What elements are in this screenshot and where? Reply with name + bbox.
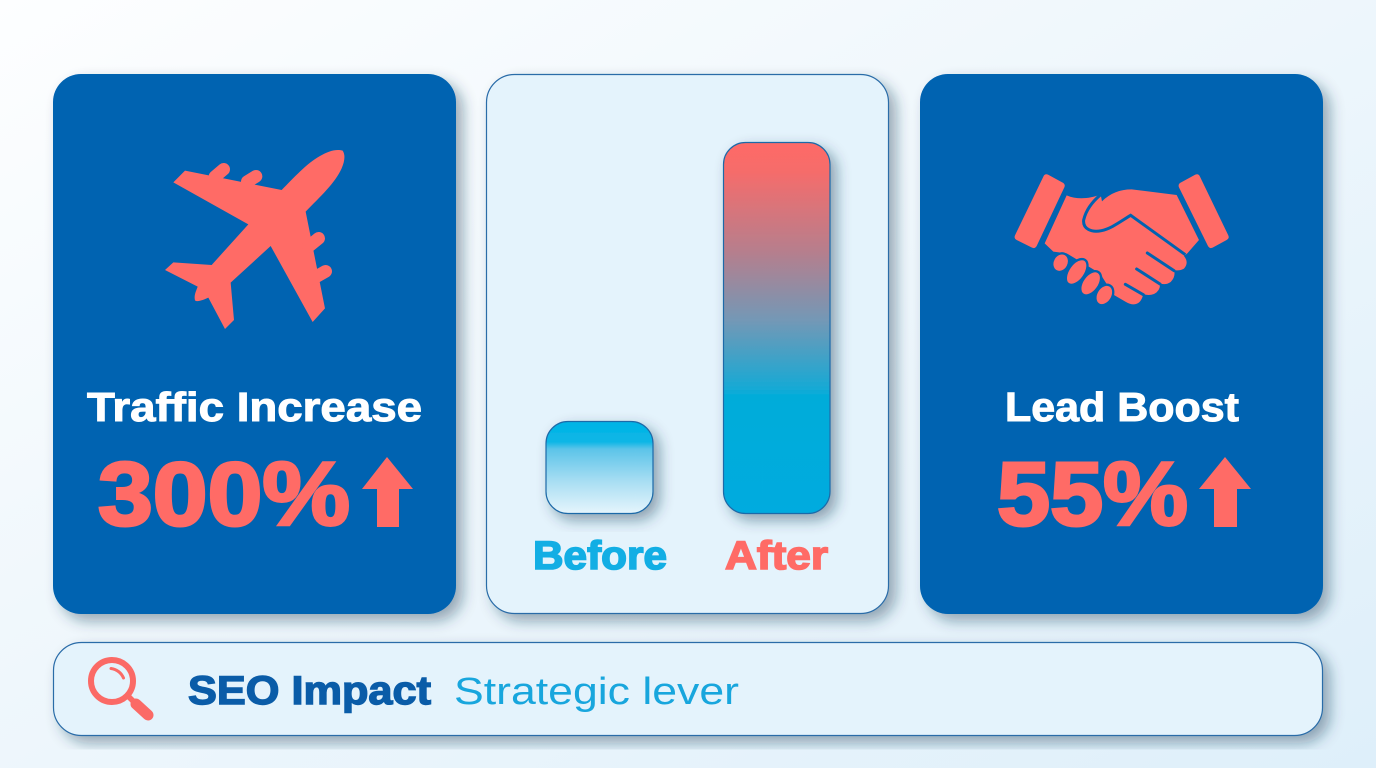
arrow: up xyxy=(362,457,413,527)
panel: traffic increase xyxy=(53,74,456,614)
arrow: up xyxy=(1199,457,1251,527)
icon: airplane xyxy=(165,150,344,329)
bar: after xyxy=(724,142,830,514)
stat: 300%: 300% xyxy=(98,445,350,545)
icon: magnifying glass xyxy=(91,660,148,715)
heading: lead boost: Lead Boost xyxy=(1005,384,1239,430)
icon: handshake xyxy=(1015,174,1229,309)
card: lead boost background xyxy=(920,74,1323,614)
heading: seo impact: SEO Impact xyxy=(188,669,431,713)
stat: 55%: 55% xyxy=(997,445,1188,545)
label: before: Before xyxy=(533,534,667,578)
panel: seo impact bar xyxy=(54,642,1322,736)
label: after: After xyxy=(725,534,828,578)
text: strategic lever: Strategic lever xyxy=(454,671,739,713)
heading: traffic increase: Traffic Increase xyxy=(87,384,422,430)
panel: before and after chart xyxy=(486,74,888,614)
panel: lead boost xyxy=(920,74,1323,614)
bar: before xyxy=(546,422,653,514)
card: traffic increase background xyxy=(53,74,456,614)
bar background xyxy=(54,642,1322,736)
card: chart background xyxy=(486,74,888,614)
